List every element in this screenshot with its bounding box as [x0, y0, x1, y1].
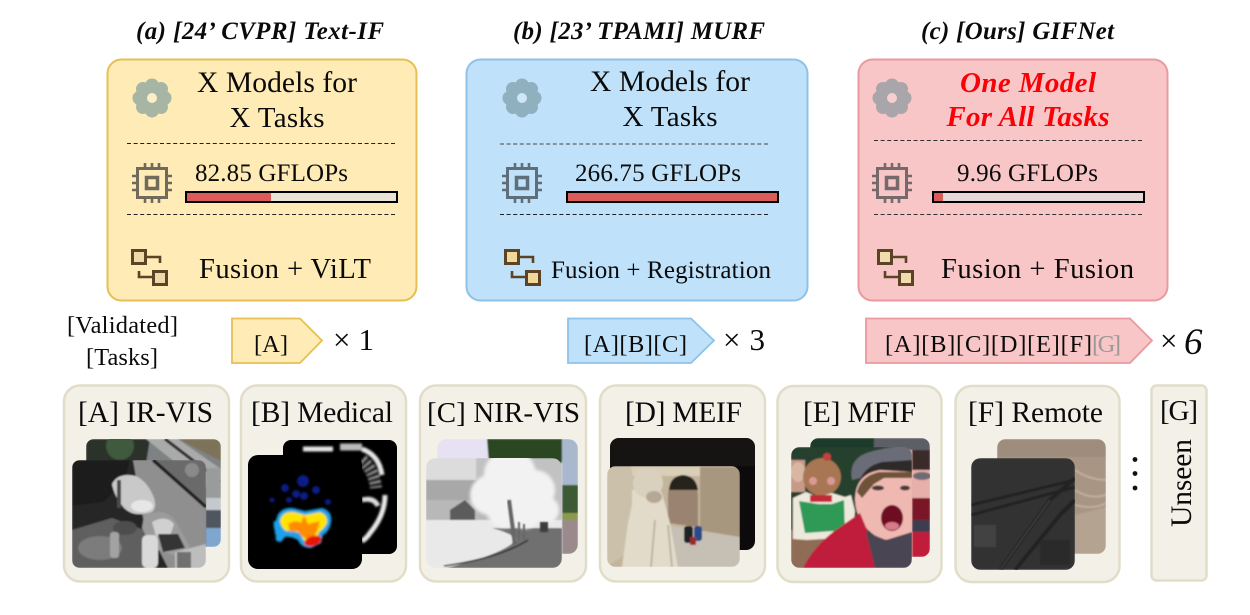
arrow tag: ABCDEFG	[866, 318, 1152, 363]
icon: chip	[132, 163, 172, 203]
icon: gear	[502, 78, 542, 118]
arrow tag: A	[232, 318, 322, 363]
arrow tag: ABCDEFG: [G]	[1092, 331, 1121, 358]
image: under-exposed	[610, 438, 755, 550]
icon: flow	[878, 250, 912, 284]
row label: [Tasks]	[86, 344, 158, 371]
panel: Text-IF	[108, 60, 416, 300]
text: GFLOPs: 82.85 GFLOPs	[195, 160, 348, 187]
image: infrared	[971, 458, 1075, 570]
icon: gear	[132, 78, 172, 118]
card: Unseen	[1152, 386, 1206, 580]
text: tasks: X Tasks	[622, 101, 718, 133]
text: one model: One Model	[960, 67, 1097, 99]
card: Remote	[956, 386, 1120, 582]
row label: [Validated]	[67, 312, 178, 339]
card title: [B] Medical	[251, 397, 393, 429]
arrow tag: ABCDEFG: [A][B][C][D][E][F]	[885, 331, 1092, 358]
multiplier: 6	[1160, 322, 1203, 363]
row label	[67, 312, 178, 371]
image: near focus	[791, 446, 912, 568]
image: near infrared	[426, 449, 562, 568]
arrow tag: A: [A]	[254, 331, 288, 358]
image: infrared	[72, 460, 206, 568]
multiplier: 6: ×	[1160, 323, 1177, 358]
text: capability: Fusion + Fusion	[941, 254, 1134, 285]
image: MRI	[283, 440, 397, 554]
icon: chip	[502, 163, 542, 203]
image: fused	[607, 466, 740, 567]
heading: GIFNet: (c) [Ours] GIFNet	[921, 18, 1115, 45]
icon: flow	[132, 250, 166, 284]
image: far focus	[810, 438, 931, 557]
text: tasks: X Tasks	[230, 102, 324, 134]
heading: Text-IF: (a) [24’ CVPR] Text-IF	[136, 18, 384, 45]
bar: 266.75	[567, 192, 778, 202]
text: GFLOPs: 9.96 GFLOPs	[957, 160, 1098, 187]
panel: MURF	[466, 60, 808, 300]
card: NIR-VIS	[420, 386, 586, 582]
text: models: X Models for	[590, 66, 750, 98]
multiplier: 3: × 3	[723, 322, 765, 357]
bar: 82.85	[186, 192, 397, 202]
icon: flow	[506, 250, 540, 284]
card: MEIF	[600, 386, 765, 582]
ellipsis dots	[1133, 457, 1137, 490]
image: visible	[437, 439, 578, 554]
icon: chip	[872, 163, 912, 203]
heading: MURF: (b) [23’ TPAMI] MURF	[513, 18, 765, 45]
bar: 9.96	[933, 192, 1144, 202]
image: visible	[997, 439, 1106, 554]
text: GFLOPs: 266.75 GFLOPs	[575, 160, 741, 187]
vertical label: Unseen	[1166, 439, 1198, 527]
card title: [D] MEIF	[625, 397, 742, 429]
icon: gear	[872, 78, 912, 118]
image: visible	[86, 432, 221, 547]
arrow tag: ABC	[568, 318, 714, 363]
card: IR-VIS	[64, 386, 229, 582]
image: PET	[248, 455, 362, 569]
card title: [E] MFIF	[803, 397, 916, 429]
text: capability: Fusion + Registration	[551, 257, 772, 284]
multiplier: 6: 6	[1184, 322, 1203, 363]
card title: [F] Remote	[968, 397, 1103, 429]
multiplier: 1: × 1	[333, 322, 374, 357]
panel: GIFNet	[858, 60, 1168, 300]
text: for all tasks: For All Tasks	[946, 101, 1110, 133]
card title: [C] NIR-VIS	[427, 397, 580, 429]
arrow tag: ABC: [A][B][C]	[584, 331, 687, 358]
text: capability: Fusion + ViLT	[199, 254, 371, 285]
card: Medical	[241, 386, 406, 582]
card: MFIF	[778, 386, 942, 582]
text: models: X Models for	[197, 67, 357, 99]
card title: [A] IR-VIS	[78, 397, 213, 429]
card title: [G]	[1160, 395, 1198, 427]
